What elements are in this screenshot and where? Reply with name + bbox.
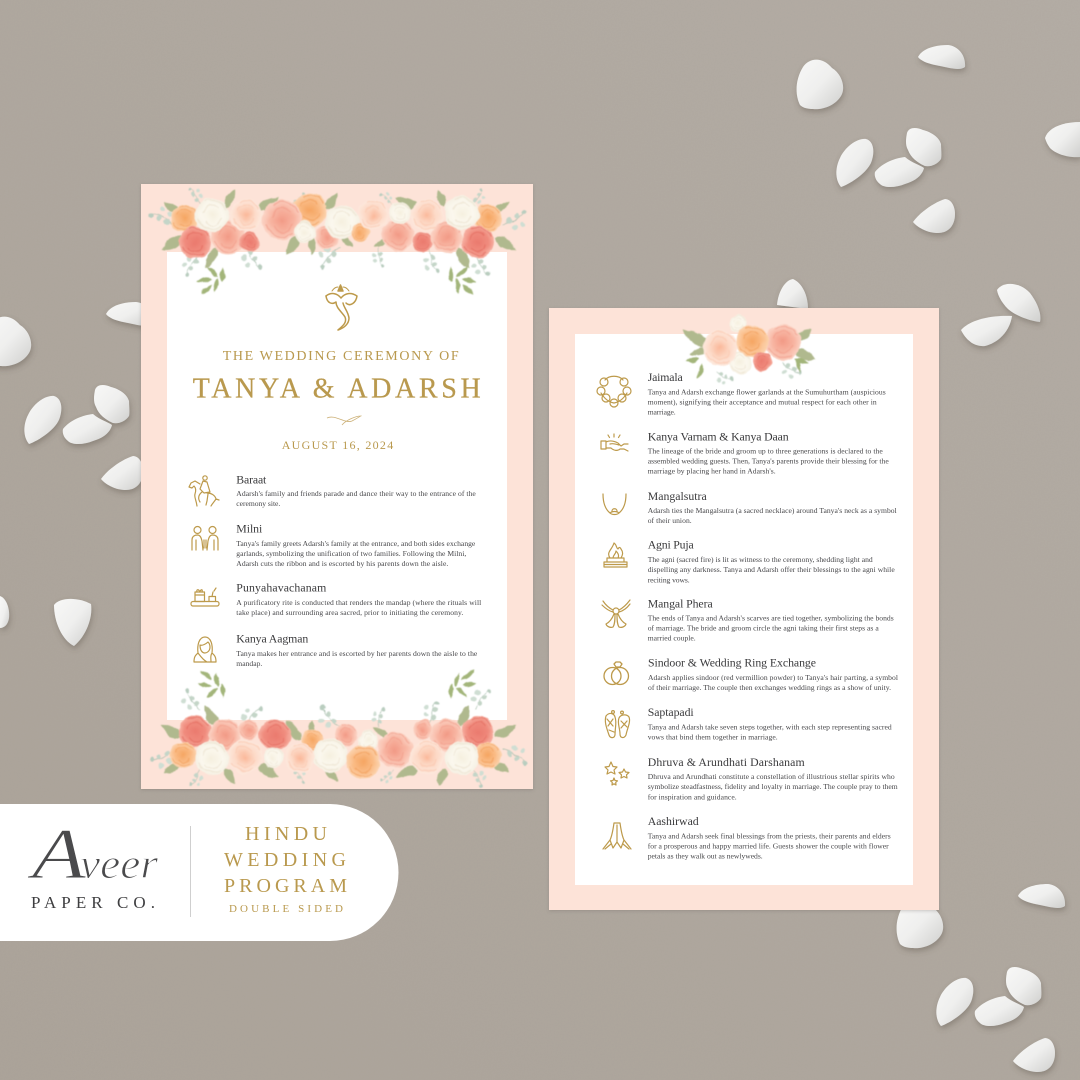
icon: stars [605,762,629,785]
text: paper co.: PAPER CO. [31,893,155,912]
program item: Agni Puja: Agni Puja [648,538,694,552]
program item: Jaimala: moment), signifying their acceptance and mutual respect for each other in [648,397,877,406]
program item: Dhruva & Arundhati Darshanam: Dhruva and Arundhati constitute a constellation of illustrious stellar spirits who [648,772,895,781]
program item: Kanya Aagman: Kanya Aagman [236,632,308,646]
program item: Kanya Varnam & Kanya Daan: The lineage of the bride and groom up to three generations is declared to the [648,446,883,455]
icon: bride with veil [194,637,216,662]
program item: Mangalsutra: of their union. [648,516,692,525]
program item: Sindoor & Wedding Ring Exchange: of their marriage. The couple then exchanges wedding rings as a show of unity. [648,683,891,692]
icon: Ganesha [326,285,357,330]
program item: Sindoor & Wedding Ring Exchange: Sindoor & Wedding Ring Exchange [648,656,816,670]
program item: Agni Puja: The agni (sacred fire) is lit as witness to the ceremony, shedding light and [648,555,873,564]
program item: Baraat: Adarsh's family and friends parade and dance their way to the entrance of the [236,489,476,498]
program item: Kanya Aagman: mandap. [236,659,262,668]
flourish [327,416,361,425]
program item: Punyahavachanam [236,581,481,617]
program item: Jaimala [648,370,886,417]
program item: Sindoor & Wedding Ring Exchange: Adarsh applies sindoor (red vermillion powder) to Tanya's hair parting, a symbol [648,673,898,682]
text: Hindu wedding program: HINDU [245,823,328,845]
bottom floral garland [148,669,531,789]
program item: Milni: Adarsh cuts the ribbon and is escorted by his parents down the aisle. [236,559,448,568]
panel: brand badge [0,804,398,941]
program item: Mangal Phera: The ends of Tanya and Adarsh's scarves are tied together, symbolizing the bonds [648,614,894,623]
logo: Aveer script [27,814,159,894]
program item: Dhruva & Arundhati Darshanam [648,755,898,801]
program item: Dhruva & Arundhati Darshanam: Dhruva & Arundhati Darshanam [648,755,805,769]
program item: Jaimala: marriage. [648,408,676,417]
program item: Kanya Varnam & Kanya Daan [648,430,889,476]
program item: Kanya Aagman: Tanya makes her entrance and is escorted by her parents down the aisle to the [236,649,478,658]
program item: Saptapadi [648,705,892,742]
program item: Milni: Tanya's family greets Adarsh's family at the entrance, and both sides exchange [236,539,476,548]
program item: Mangal Phera [648,596,894,643]
program item: Saptapadi: Tanya and Adarsh take seven steps together, with each step representing sacred [648,723,892,732]
text: Hindu wedding program: PROGRAM [224,875,347,897]
icon: offerings tray [191,588,219,606]
program item: Agni Puja: dispelling any darkness. Tanya and Adarsh offer their blessings to the agni while [648,565,895,574]
program item: Aashirwad [648,814,891,861]
logo: Aveer script: A [27,814,87,894]
program item: Kanya Varnam & Kanya Daan: assembled wedding guests. Then, Tanya's parents provide their blessing for the [648,456,889,465]
program item: Agni Puja [648,538,895,584]
logo: Aveer script: veer [80,842,159,888]
program item: Mangalsutra: Adarsh ties the Mangalsutra (a sacred necklace) around Tanya's neck as a symbol [648,506,897,515]
title: Tanya & Adarsh: TANYA & ADARSH [193,373,481,404]
icon: flower garland [597,376,631,407]
text: Hindu wedding program [224,823,347,897]
program item: Mangal Phera: Mangal Phera [648,596,713,610]
program item: Milni [236,522,476,568]
program item: Kanya Aagman [236,632,478,668]
program item: Baraat: ceremony site. [236,499,280,508]
icon: tied scarves [602,600,630,627]
small floral bouquet [680,315,818,386]
program item: Mangalsutra [648,489,897,525]
program item: Jaimala: Tanya and Adarsh exchange flower garlands at the Sumuhurtham (auspicious [648,387,886,396]
panel: front card [141,184,533,789]
program item: Dhruva & Arundhati Darshanam: for inspiration and guidance. [648,792,737,801]
icon: joined hands [601,434,628,451]
program item: Aashirwad: Tanya and Adarsh seek final blessings from the priests, their parents and elders [648,832,891,841]
program item: Saptapadi: Saptapadi [648,705,694,719]
program item: Mangal Phera: married couple. [648,634,696,643]
program item: Mangalsutra: Mangalsutra [648,489,707,503]
program item: Aashirwad: for a prosperous and happy married life. Guests shower the couple with flower [648,842,889,851]
program item: Dhruva & Arundhati Darshanam: symbolize steadfastness, fidelity and loyalty in marriage. The couple pray to them [648,782,898,791]
program item: Punyahavachanam: Punyahavachanam [236,581,326,595]
program item: Baraat: Baraat [236,472,267,486]
divider [190,826,191,917]
panel: back card [549,308,939,910]
program item: Jaimala: Jaimala [648,370,683,384]
program item: Sindoor & Wedding Ring Exchange [648,656,898,692]
program item: Kanya Varnam & Kanya Daan: Kanya Varnam & Kanya Daan [648,430,789,444]
program item: Milni: Milni [236,522,263,536]
icon: sacred fire [604,543,627,567]
program item: Punyahavachanam: take place) and surrounding area sacred, prior to initiating the ceremony. [236,608,463,617]
program item: Agni Puja: reciting vows. [648,575,690,584]
program item: Aashirwad: petals as they walk out as newlyweds. [648,852,763,861]
icon: wedding rings [604,662,628,684]
icon: decorated feet [605,711,630,738]
program item: Saptapadi: vows that bind them together in marriage. [648,733,778,742]
top floral garland [148,186,531,296]
program item: Kanya Varnam & Kanya Daan: marriage by placing her hand in Adarsh's. [648,467,776,476]
program item: Punyahavachanam: A purificatory rite is conducted that renders the mandap (where the rituals will [236,598,481,607]
text: Hindu wedding program: WEDDING [224,849,346,871]
icon: horse and rider [189,476,219,506]
icon: two figures greeting [192,526,218,550]
text: the wedding ceremony of: THE WEDDING CEREMONY OF [223,349,459,364]
program item: Mangal Phera: of marriage. The bride and groom circle the agni taking their first steps as a [648,624,879,633]
text: date: AUGUST 16, 2024 [282,438,393,452]
program item: Baraat [236,472,476,508]
icon: necklace [603,494,626,514]
text: double sided: DOUBLE SIDED [229,903,343,915]
program item: Aashirwad: Aashirwad [648,814,699,828]
icon: praying hands [603,823,631,849]
program item: Milni: garlands, symbolizing the unification of two families. Following the Milni, [236,549,466,558]
